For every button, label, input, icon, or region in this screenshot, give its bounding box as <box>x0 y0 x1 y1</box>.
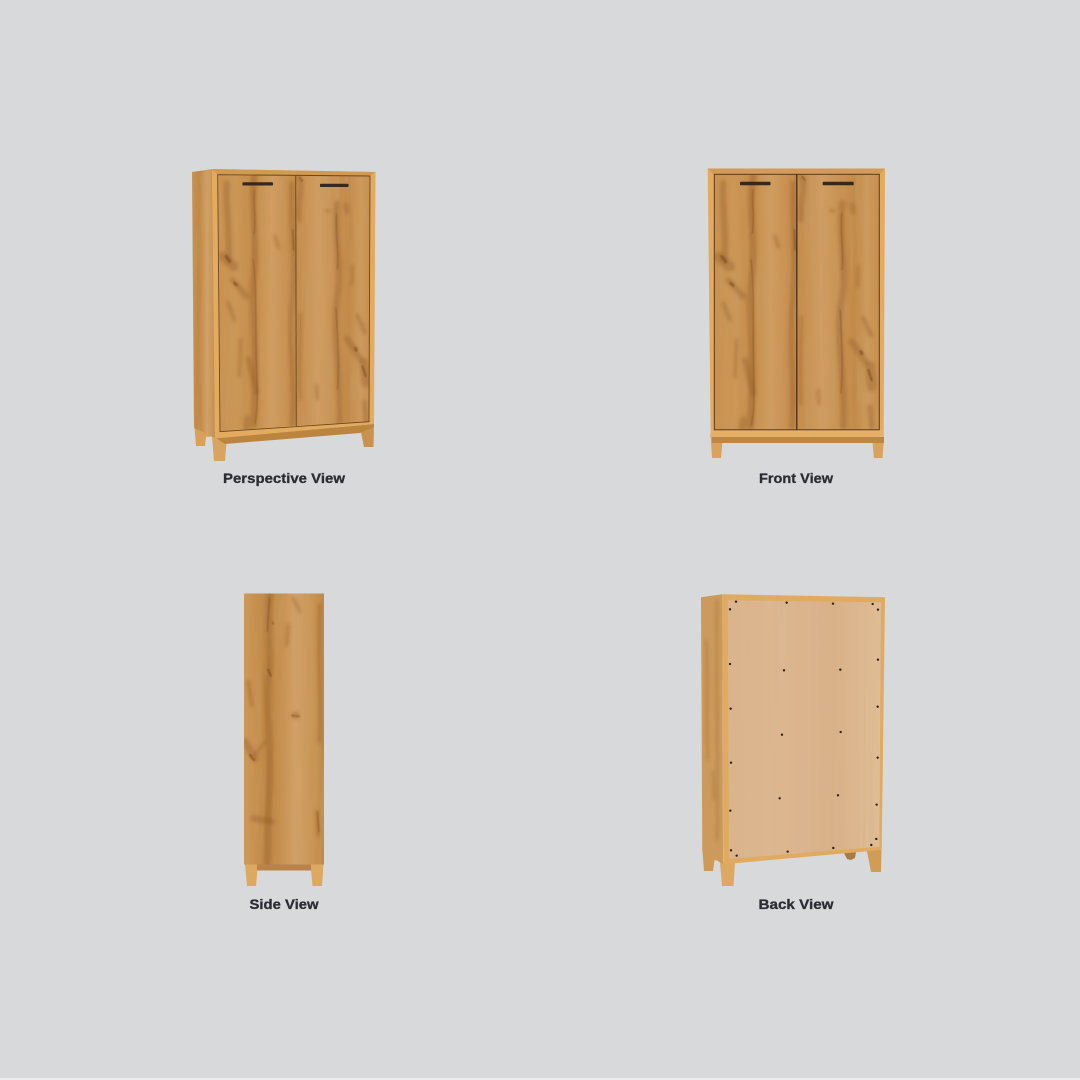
panel: side view <box>244 594 324 886</box>
panel: perspective view <box>190 168 376 461</box>
door outlines <box>218 175 370 432</box>
panel: front view <box>708 168 885 458</box>
legs <box>245 864 324 886</box>
screw holes <box>729 600 879 857</box>
leg: back left <box>194 425 216 446</box>
back panel <box>726 599 883 861</box>
handle: left <box>740 182 770 185</box>
leg: front <box>720 862 735 886</box>
right door <box>797 174 880 430</box>
left door <box>714 174 797 430</box>
wood grain <box>714 174 880 430</box>
legs <box>711 437 884 458</box>
handle: right <box>823 182 854 185</box>
frame <box>722 594 885 864</box>
leg: back middle <box>844 852 856 860</box>
apron <box>257 864 311 870</box>
side panel <box>700 594 724 866</box>
leg: front left <box>212 436 227 461</box>
leg: right <box>360 424 374 447</box>
apron <box>216 424 374 444</box>
leg: right <box>867 849 882 872</box>
left door <box>218 175 296 432</box>
side panel <box>244 594 324 864</box>
door outlines <box>714 174 879 430</box>
label: back view: Back View <box>758 896 834 912</box>
frame <box>708 168 885 436</box>
side panel <box>192 169 215 438</box>
label: side view: Side View <box>250 896 319 912</box>
handle: left <box>242 182 273 186</box>
panel: back view <box>700 594 885 886</box>
front frame <box>212 169 376 438</box>
apron <box>712 436 884 443</box>
handle: right <box>320 184 348 187</box>
right door <box>296 176 370 426</box>
leg: back left <box>702 848 724 871</box>
label: perspective view: Perspective View <box>223 470 345 486</box>
label: front view: Front View <box>759 470 833 486</box>
